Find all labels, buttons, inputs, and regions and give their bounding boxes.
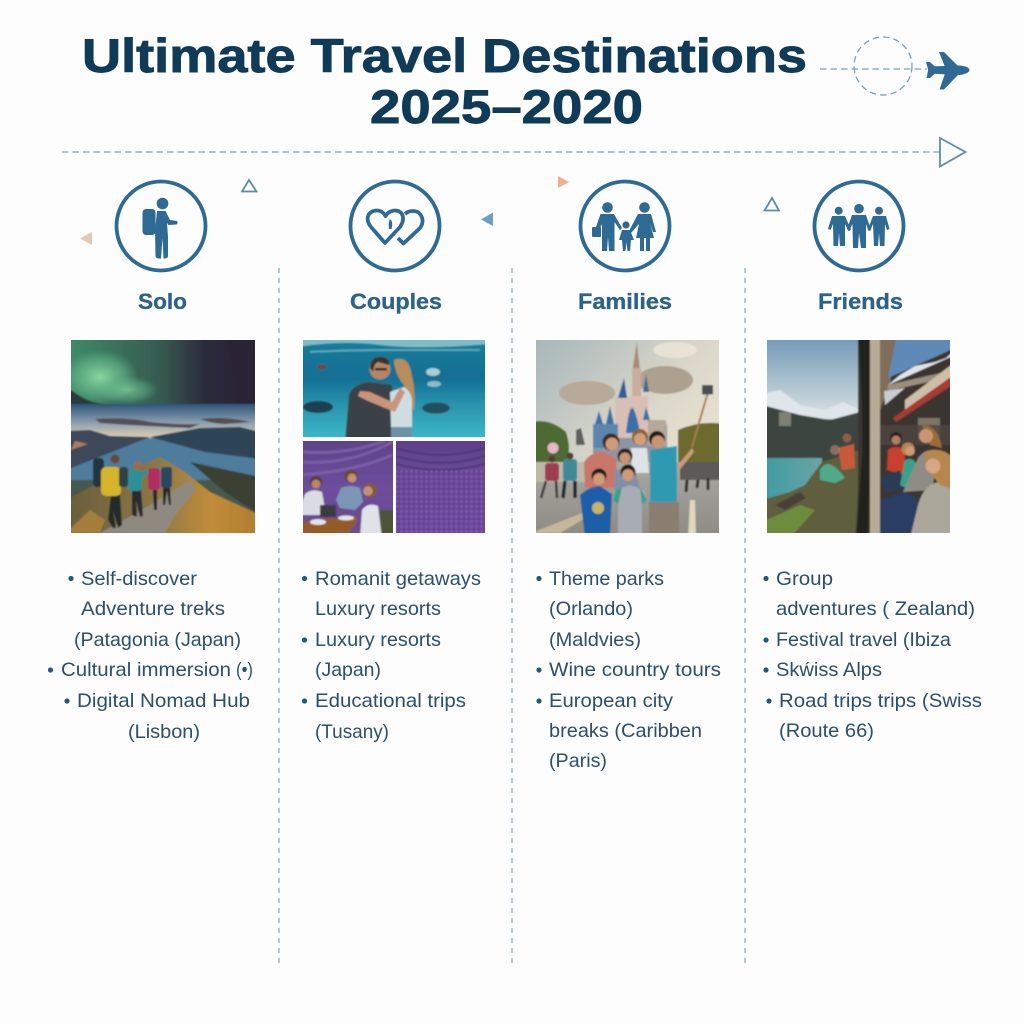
- list: friends destinations: adventures ( Zealand): [776, 598, 975, 620]
- icon: two hearts: [350, 182, 440, 270]
- icon: solo backpacker: [116, 182, 206, 270]
- heading: Couples: Couples: [350, 289, 442, 314]
- list: solo destinations: Cultural immersion: [61, 659, 231, 681]
- list: solo destinations: Adventure treks: [81, 598, 225, 620]
- panel: solo: [48, 182, 260, 743]
- heading: Families: Families: [578, 289, 672, 314]
- photo: lavender field picnic: [303, 441, 393, 533]
- title: Ultimate Travel Destinations: [82, 29, 807, 82]
- list: solo destinations: (•): [236, 659, 253, 681]
- list: friends destinations: Road trips trips (Swiss: [779, 690, 982, 712]
- photo: lavender field: [396, 441, 485, 533]
- panel: couples: [298, 182, 490, 743]
- list: couples destinations: Luxury resorts: [315, 629, 441, 651]
- list: couples destinations: (Tusany): [315, 721, 389, 743]
- list: couples destinations: Educational trips: [315, 690, 466, 712]
- list: friends destinations: [763, 568, 982, 742]
- decorative triangle markers: [80, 176, 779, 245]
- list: friends destinations: Group: [776, 568, 833, 590]
- list: families destinations: Theme parks: [549, 568, 664, 590]
- list: couples destinations: [302, 568, 481, 743]
- icon: airplane with dashed orbit: [820, 37, 970, 95]
- list: families destinations: [536, 568, 721, 772]
- panel: families: [531, 182, 724, 772]
- list: families destinations: breaks (Caribben: [549, 720, 702, 742]
- list: friends destinations: Skẃiss Alps: [776, 659, 882, 681]
- list: families destinations: (Orlando): [549, 598, 633, 620]
- icon: family holding hands: [580, 182, 670, 270]
- photo collage: aurora and mountain hikers: [71, 340, 255, 533]
- timeline arrow: [62, 138, 966, 166]
- panel: friends: [762, 182, 982, 742]
- list: couples destinations: (Japan): [315, 659, 381, 681]
- column dividers: [279, 268, 745, 966]
- list: friends destinations: (Route 66): [779, 720, 874, 742]
- heading: Friends: Friends: [818, 289, 903, 314]
- photo: family selfie at castle: [531, 335, 724, 538]
- photo: friends on scenic train: [762, 335, 955, 538]
- list: solo destinations: (Patagonia (Japan): [74, 629, 241, 651]
- photo collage: underwater couple: [303, 340, 485, 437]
- list: families destinations: (Maldvies): [549, 629, 641, 651]
- list: families destinations: (Paris): [549, 750, 607, 772]
- list: couples destinations: Romanit getaways: [315, 568, 481, 590]
- title: [82, 29, 807, 133]
- list: families destinations: European city: [549, 690, 673, 712]
- list: solo destinations: [48, 568, 253, 743]
- list: friends destinations: Festival travel (Ibiza: [776, 629, 951, 651]
- list: families destinations: Wine country tours: [549, 659, 721, 681]
- heading: Solo: Solo: [138, 289, 187, 314]
- list: couples destinations: Luxury resorts: [315, 598, 441, 620]
- title: 2025–2020: [370, 80, 643, 133]
- hikers: [108, 495, 122, 528]
- icon: three friends: [814, 182, 904, 270]
- list: solo destinations: (Lisbon): [128, 721, 200, 743]
- list: solo destinations: Self-discover: [81, 568, 198, 590]
- list: solo destinations: Digital Nomad Hub: [77, 690, 250, 712]
